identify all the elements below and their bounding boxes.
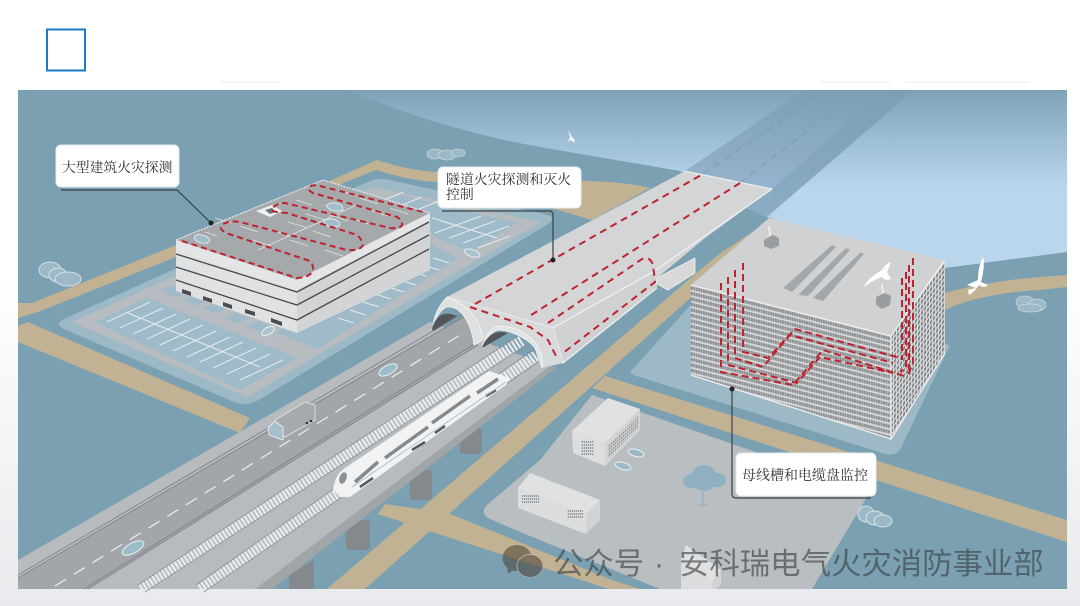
small building C (681, 545, 721, 589)
portal rings (433, 297, 483, 345)
building base shadow (630, 300, 950, 454)
sea background (18, 90, 1067, 589)
deck side (245, 365, 556, 589)
tan roads (18, 160, 1067, 589)
parking lines (107, 192, 510, 380)
icon: bird top (568, 130, 575, 143)
right parking area near (277, 243, 458, 349)
portal gable (447, 297, 563, 368)
portal openings (432, 314, 457, 331)
label: tunnel fire detection and suppression: 隧道火灾探测和灭火 (446, 171, 571, 188)
cloud right (1016, 296, 1046, 312)
road dashes (55, 335, 460, 586)
faint header remnants (220, 81, 1030, 83)
rooftop cars (193, 202, 344, 245)
tunnel end box (657, 258, 695, 290)
truck (268, 402, 315, 440)
rail tracks (138, 335, 541, 592)
building: large building with roof parking (176, 180, 430, 333)
watermark text: 安科瑞电气火灾消防事业部 (679, 547, 1044, 581)
parking lot base (59, 179, 552, 404)
watermark text: 公众号 (553, 547, 644, 581)
piers (289, 428, 482, 589)
tunnel roof (447, 171, 772, 363)
ground floor windows (182, 289, 282, 326)
right parking area rear (370, 195, 517, 252)
small building B (518, 473, 600, 534)
building: monitored tall building (691, 218, 945, 439)
label: large building fire detection (56, 145, 179, 187)
watermark text: · (654, 547, 664, 581)
elevated road and railway viaduct (18, 314, 556, 592)
icon: tree (683, 465, 726, 505)
land: lower island (484, 395, 870, 589)
icon: blue square (47, 30, 85, 70)
label: tunnel fire detection and suppression: 控制 (446, 186, 474, 203)
bridge over water (685, 90, 914, 229)
icon: bird on roof (864, 262, 891, 287)
cloud top (427, 149, 465, 160)
car: road near portal (377, 361, 399, 379)
cars near building (614, 448, 645, 471)
watermark icon: chat bubbles (502, 545, 543, 578)
label: large building fire detection: 大型建筑火灾探测 (62, 159, 173, 175)
left parking area (95, 298, 297, 390)
red sensor cable route on roof (182, 185, 423, 278)
cloud left (39, 262, 81, 286)
lake: light water (347, 90, 1067, 268)
vent smoke (769, 226, 883, 293)
cloud bottom right (858, 506, 892, 527)
leader line: building (61, 190, 214, 226)
small building A (572, 398, 640, 466)
train (333, 371, 510, 497)
asphalt (18, 316, 478, 589)
car: parking right (463, 247, 481, 259)
roof vent (256, 205, 282, 217)
roof vents (764, 235, 891, 309)
red sensor cables in building (721, 258, 913, 385)
leader line: tunnel (442, 211, 556, 262)
car: road front (120, 538, 146, 558)
leader line: busway (730, 386, 871, 498)
car: parking front (260, 324, 276, 338)
label: busway and cable tray monitoring (736, 453, 876, 496)
label: busway and cable tray monitoring: 母线槽和电缆盘监控 (742, 467, 868, 484)
roof markings (205, 190, 408, 256)
red sensor cables in tunnel (470, 174, 740, 358)
roof skylights (783, 245, 864, 301)
icon: bird right (967, 257, 988, 295)
front parking bays (160, 286, 272, 332)
tunnel side (553, 272, 657, 363)
label: tunnel fire detection and suppression (438, 167, 581, 208)
deck top (18, 322, 550, 589)
tunnel (432, 171, 772, 368)
